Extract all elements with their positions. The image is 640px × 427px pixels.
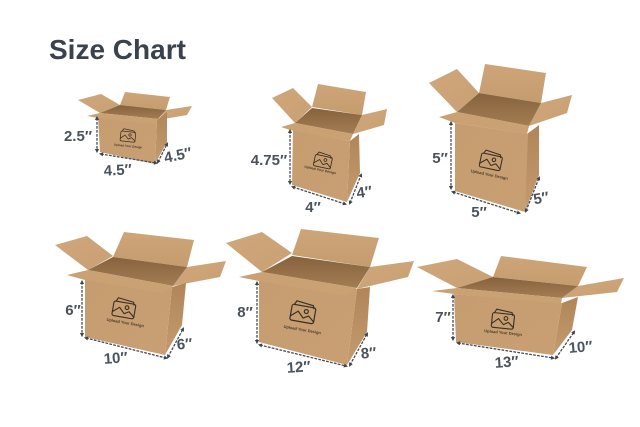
left flap bbox=[417, 259, 493, 288]
label: height: 7″ bbox=[435, 309, 451, 326]
icon: upload your design bbox=[491, 309, 515, 329]
height dimension bbox=[96, 118, 98, 151]
front face bbox=[98, 117, 157, 164]
box interior bbox=[88, 257, 187, 286]
width dimension bbox=[293, 187, 345, 204]
front flap bbox=[67, 270, 173, 293]
label: depth: 4.5″ bbox=[163, 144, 194, 167]
label: height: 8″ bbox=[237, 304, 253, 321]
width dimension bbox=[260, 345, 346, 366]
left flap bbox=[272, 88, 312, 123]
depth dimension bbox=[350, 175, 361, 203]
back flap bbox=[292, 229, 379, 267]
right flap bbox=[562, 278, 624, 298]
label: depth: 4″ bbox=[356, 183, 373, 202]
label: height: 6″ bbox=[65, 302, 81, 319]
label: height: 4.75″ bbox=[251, 152, 287, 169]
back flap bbox=[479, 64, 546, 103]
left flap bbox=[55, 236, 113, 270]
height dimension bbox=[256, 283, 258, 342]
icon: upload your design bbox=[313, 151, 333, 169]
height dimension bbox=[450, 123, 452, 188]
box interior bbox=[295, 108, 362, 134]
back flap bbox=[120, 92, 170, 110]
label: depth: 10″ bbox=[568, 338, 593, 357]
left flap bbox=[226, 232, 292, 272]
right flap bbox=[353, 109, 387, 134]
logo caption: Upload Your Design bbox=[114, 143, 143, 149]
box: 10 x 6 x 6 bbox=[55, 232, 226, 368]
side face bbox=[553, 297, 578, 355]
box: 4 x 4 x 4.75 bbox=[251, 84, 387, 216]
front flap bbox=[281, 123, 353, 141]
box: 12 x 8 x 8 bbox=[226, 229, 414, 377]
box: 4.5 x 4.5 x 2.5 bbox=[64, 92, 194, 180]
front face bbox=[454, 294, 562, 355]
label: height: 5″ bbox=[432, 150, 448, 167]
back flap bbox=[312, 84, 366, 115]
depth dimension bbox=[168, 329, 183, 357]
front face bbox=[85, 280, 172, 355]
label: width: 5″ bbox=[471, 204, 487, 221]
logo caption: Upload Your Design bbox=[106, 317, 145, 328]
front face bbox=[292, 130, 350, 202]
side face bbox=[347, 287, 370, 365]
right flap bbox=[529, 95, 572, 126]
width dimension bbox=[453, 192, 519, 213]
depth dimension bbox=[158, 144, 167, 162]
icon: upload your design bbox=[120, 128, 136, 142]
front flap bbox=[439, 112, 529, 134]
front flap bbox=[432, 288, 562, 304]
label: depth: 8″ bbox=[360, 344, 377, 363]
depth dimension bbox=[556, 332, 574, 358]
logo caption: Upload Your Design bbox=[484, 328, 523, 337]
label: height: 2.5″ bbox=[64, 128, 92, 145]
logo caption: Upload Your Design bbox=[304, 165, 336, 175]
title: Size Chart bbox=[49, 34, 186, 65]
width dimension bbox=[86, 338, 166, 358]
icon: upload your design bbox=[479, 149, 503, 171]
front face bbox=[455, 123, 528, 212]
label: width: 4.5″ bbox=[103, 161, 132, 180]
height dimension bbox=[452, 296, 454, 339]
right flap bbox=[173, 261, 226, 286]
label: width: 12″ bbox=[286, 358, 311, 377]
label: depth: 5″ bbox=[532, 189, 550, 208]
label: depth: 6″ bbox=[176, 335, 193, 354]
logo caption: Upload Your Design bbox=[470, 168, 509, 181]
width dimension bbox=[458, 343, 553, 358]
side face bbox=[525, 125, 539, 212]
right flap bbox=[357, 261, 414, 289]
depth dimension bbox=[350, 334, 367, 365]
depth dimension bbox=[526, 178, 539, 211]
left flap bbox=[429, 69, 479, 112]
side face bbox=[155, 112, 167, 164]
side face bbox=[165, 283, 186, 355]
box: 13 x 10 x 7 bbox=[417, 256, 624, 372]
box interior bbox=[262, 256, 370, 288]
box interior bbox=[100, 105, 166, 119]
side face bbox=[347, 134, 360, 202]
label: width: 4″ bbox=[305, 199, 321, 216]
icon: upload your design bbox=[290, 300, 317, 324]
front flap bbox=[87, 113, 158, 124]
icon: upload your design bbox=[112, 297, 137, 319]
box interior bbox=[457, 277, 578, 298]
logo caption: Upload Your Design bbox=[283, 324, 322, 335]
height dimension bbox=[81, 282, 83, 335]
label: width: 10″ bbox=[103, 349, 128, 368]
left flap bbox=[78, 94, 120, 113]
back flap bbox=[493, 256, 587, 286]
width dimension bbox=[101, 154, 156, 163]
front flap bbox=[239, 272, 357, 296]
label: width: 13″ bbox=[494, 353, 519, 372]
back flap bbox=[113, 232, 194, 267]
front face bbox=[259, 280, 357, 365]
box interior bbox=[457, 93, 541, 126]
box: 5 x 5 x 5 bbox=[429, 64, 572, 221]
height dimension bbox=[289, 131, 291, 183]
right flap bbox=[158, 106, 192, 120]
